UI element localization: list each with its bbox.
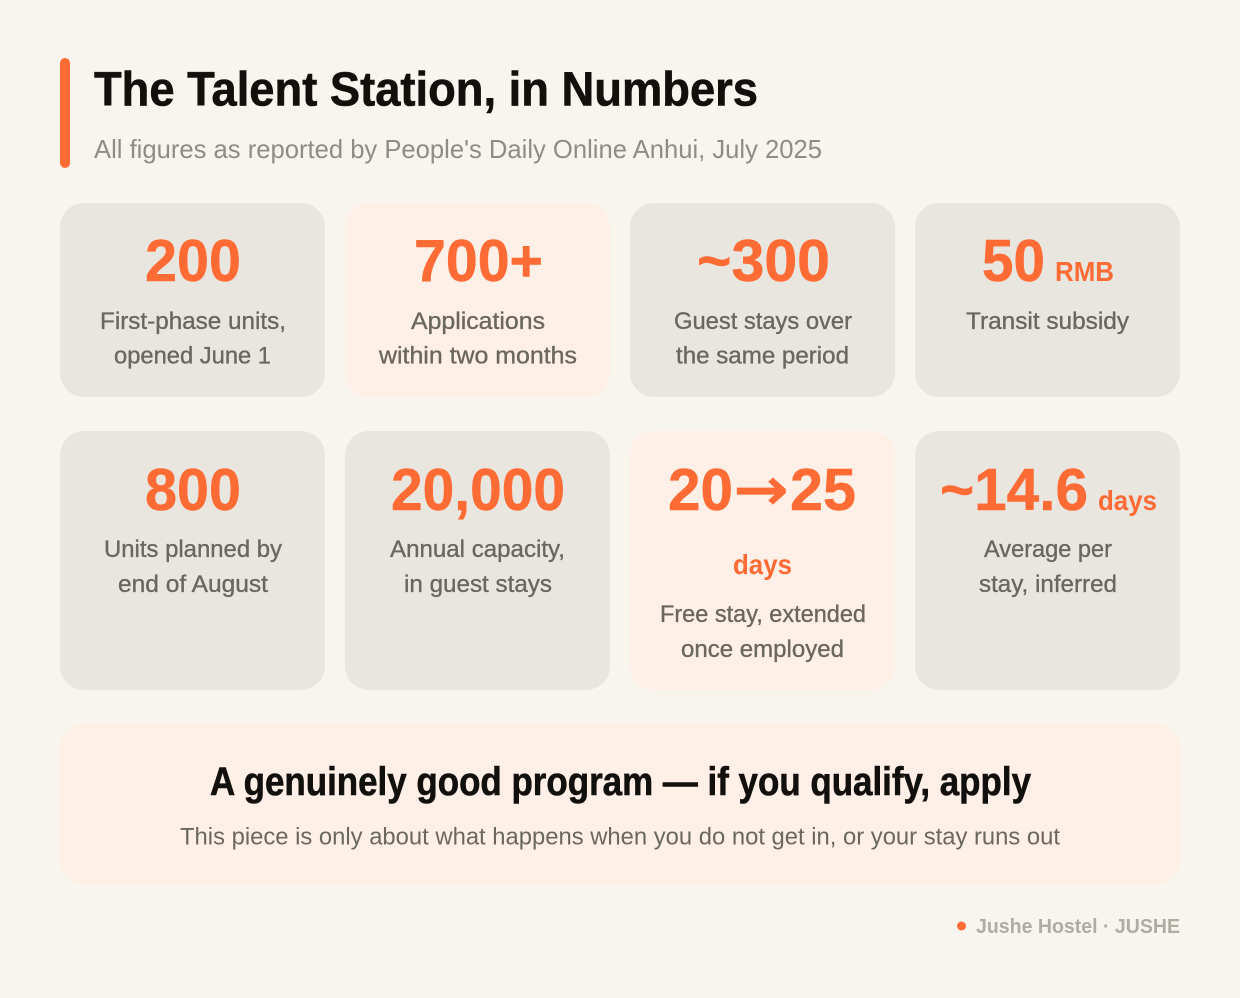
stat card: ~300 guest stays: the same period bbox=[676, 342, 849, 370]
callout text: This piece is only about what happens when you do not get in, or your stay runs out bbox=[180, 824, 1060, 850]
stat card: 200 units: 200 bbox=[145, 228, 241, 294]
stat card: 20,000 capacity: in guest stays bbox=[404, 571, 552, 598]
stat card: 20 to 25 days free stay: once employed bbox=[681, 636, 844, 663]
stat card: 700+ applications: Applications bbox=[411, 308, 545, 335]
stat card: 50 RMB subsidy bbox=[915, 203, 1180, 397]
stat card: 800 units planned: end of August bbox=[118, 571, 268, 598]
stat card: ~14.6 days average: days bbox=[1098, 485, 1157, 516]
stat card: 20,000 capacity: 20,000 bbox=[391, 457, 565, 523]
stat card: 20 to 25 days free stay: → bbox=[733, 455, 789, 525]
stat card: 200 units: First-phase units, bbox=[100, 308, 286, 335]
stat card: ~300 guest stays: ~300 bbox=[697, 228, 830, 294]
stat card: 50 RMB subsidy: RMB bbox=[1055, 256, 1114, 287]
stat card: ~14.6 days average: ~14.6 bbox=[940, 457, 1088, 523]
accent bar bbox=[60, 58, 70, 168]
stat card: ~14.6 days average bbox=[915, 431, 1180, 690]
stat card: 700+ applications bbox=[345, 203, 610, 397]
stat card: 700+ applications: 700+ bbox=[414, 228, 543, 294]
header bbox=[60, 58, 822, 168]
stat card: 20 to 25 days free stay: days bbox=[733, 549, 792, 580]
stat card: 20 to 25 days free stay bbox=[630, 431, 895, 690]
stat card: 200 units: opened June 1 bbox=[114, 342, 271, 370]
stat card: ~14.6 days average: stay, inferred bbox=[979, 571, 1117, 598]
callout heading: A genuinely good program — if you qualify, apply bbox=[210, 760, 1032, 804]
stat card: 20,000 capacity bbox=[345, 431, 610, 690]
stat card: 20,000 capacity: Annual capacity, bbox=[390, 536, 565, 563]
stat card: 50 RMB subsidy: 50 bbox=[982, 228, 1045, 294]
stat card: 800 units planned bbox=[60, 431, 325, 690]
stat card: 50 RMB subsidy: Transit subsidy bbox=[966, 308, 1129, 335]
stat card: 800 units planned: Units planned by bbox=[104, 536, 282, 563]
callout banner bbox=[60, 724, 1180, 884]
stat card: ~300 guest stays: Guest stays over bbox=[674, 308, 852, 335]
stat card: 200 units bbox=[60, 203, 325, 397]
stat card: ~14.6 days average: Average per bbox=[984, 536, 1112, 563]
stat card: 20 to 25 days free stay: Free stay, extended bbox=[660, 601, 866, 628]
subtitle: All figures as reported by People's Daily Online Anhui, July 2025 bbox=[94, 134, 822, 164]
stat card: ~300 guest stays bbox=[630, 203, 895, 397]
footer brand: Jushe Hostel · JUSHE bbox=[976, 916, 1180, 938]
title: The Talent Station, in Numbers bbox=[94, 64, 758, 116]
stat card: 700+ applications: within two months bbox=[378, 342, 577, 370]
stat card: 800 units planned: 800 bbox=[145, 457, 241, 523]
stat card: 20 to 25 days free stay: 20 bbox=[668, 457, 733, 523]
stat card: 20 to 25 days free stay: 25 bbox=[790, 457, 856, 523]
